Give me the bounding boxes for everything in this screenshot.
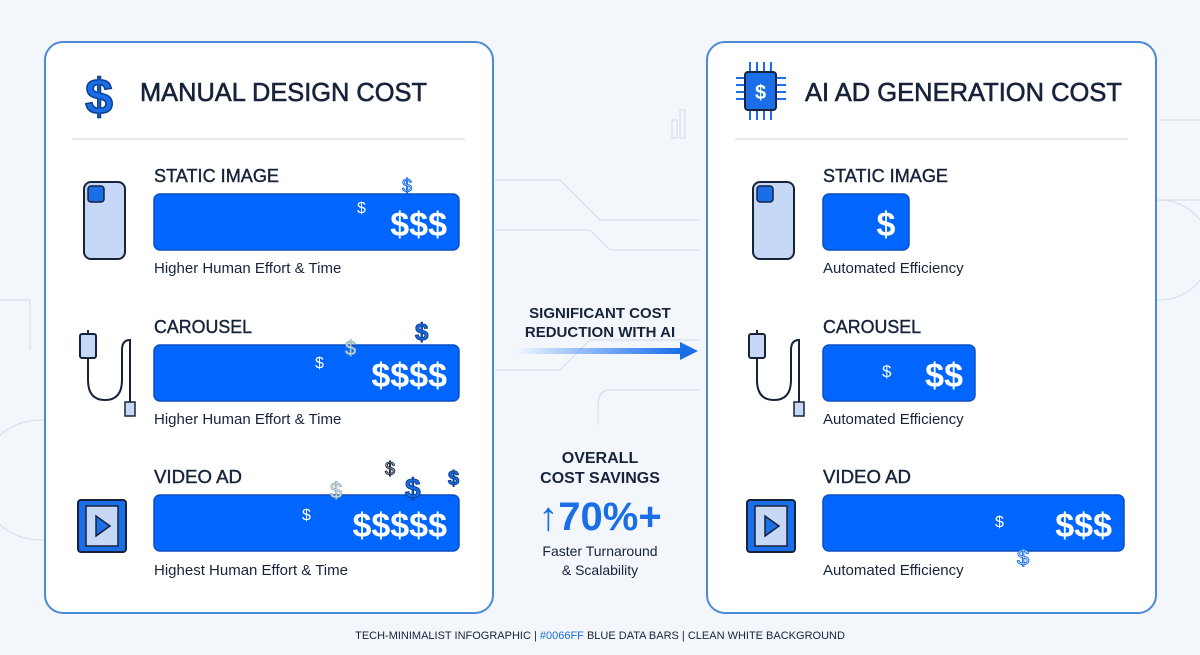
background circuit lines [0,110,1200,540]
row: ai carousel: CAROUSEL [823,317,921,337]
row: video ad: $ [385,459,395,479]
heading: ai ad generation cost: AI AD GENERATION COST [805,77,1122,107]
row: carousel: CAROUSEL [154,317,252,337]
row: ai video ad: $ [1017,545,1029,570]
icon: chip dollar: $ [755,82,766,104]
row: video ad: Highest Human Effort & Time [154,562,348,579]
row: video ad: $ [302,507,311,524]
panel: manual design cost [45,42,493,613]
row: carousel: $$$$ [371,357,447,395]
row: static image: Higher Human Effort & Time [154,260,341,277]
row: carousel: $ [345,338,356,360]
icon: chip dollar [736,62,786,120]
footer caption: TECH-MINIMALIST INFOGRAPHIC | #0066FF BLUE DATA BARS | CLEAN WHITE BACKGROUND [355,630,845,642]
center callout: cost reduction arrow: REDUCTION WITH AI [525,324,675,341]
row: ai static image [753,166,964,277]
panel: ai ad generation cost [707,42,1156,613]
row: ai carousel: $ [882,362,892,381]
row: video ad: VIDEO AD [154,467,242,487]
center callout: overall savings: & Scalability [562,562,638,578]
row: carousel [80,317,459,428]
row: ai static image: Automated Efficiency [823,260,964,277]
center callout: overall savings: Faster Turnaround [542,543,658,559]
row: ai video ad: $$$ [1055,507,1112,545]
center callout: overall savings [538,450,662,578]
row: carousel: $ [315,355,324,372]
row: ai carousel: Automated Efficiency [823,411,964,428]
row: video ad: $$$$$ [352,507,447,545]
center callout: cost reduction arrow: SIGNIFICANT COST [529,305,671,322]
row: ai video ad: Automated Efficiency [823,562,964,579]
row: static image: $ [402,176,412,196]
row: ai video ad: $ [995,514,1004,531]
row: video ad: $ [405,473,421,504]
row: carousel: $ [415,319,429,346]
row: video ad: $ [330,478,342,503]
row: video ad: $ [448,468,459,490]
row: ai carousel [749,317,975,428]
row: ai video ad [747,467,1124,579]
center callout: cost reduction arrow [515,305,698,360]
row: static image: $$$ [390,206,447,244]
row: ai video ad: VIDEO AD [823,467,911,487]
row: static image: STATIC IMAGE [154,166,279,186]
row: ai static image: STATIC IMAGE [823,166,948,186]
heading: manual design cost: MANUAL DESIGN COST [140,77,427,107]
center callout: overall savings: ↑70%+ [538,495,662,539]
row: ai carousel: $$ [925,357,963,395]
row: static image [84,166,459,277]
row: static image: $ [357,200,366,217]
center callout: overall savings: COST SAVINGS [540,470,660,487]
row: ai static image: $ [877,206,896,244]
center callout: overall savings: OVERALL [562,450,638,467]
icon: dollar: $ [85,69,113,125]
row: video ad [78,459,459,579]
row: carousel: Higher Human Effort & Time [154,411,341,428]
